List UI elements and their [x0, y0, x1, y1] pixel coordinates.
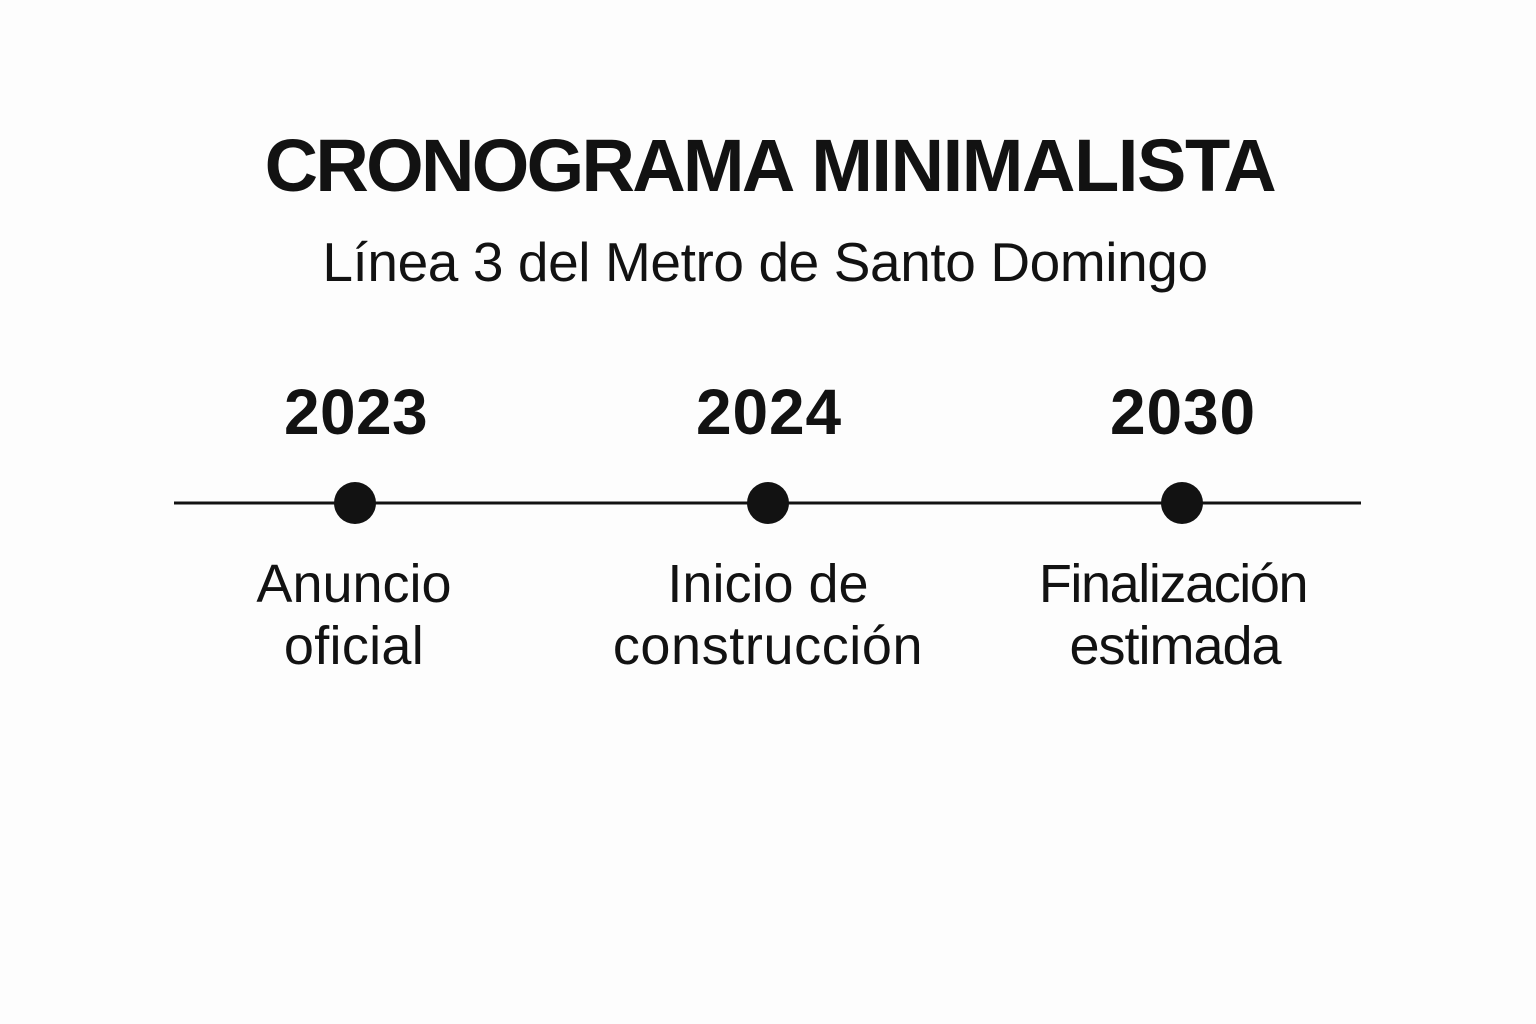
label: Finalización estimada: Finalización	[1039, 554, 1307, 614]
label: Finalización estimada	[1039, 554, 1307, 676]
label: Finalización estimada: estimada	[1069, 616, 1281, 676]
year 2030: 2030	[1110, 376, 1256, 448]
label: Anuncio oficial: oficial	[284, 616, 424, 676]
label: Anuncio oficial: Anuncio	[256, 554, 452, 614]
title: CRONOGRAMA MINIMALISTA	[265, 124, 1275, 207]
year 2024: 2024	[696, 376, 842, 448]
marker 2023	[334, 482, 376, 524]
label: Inicio de construcción	[613, 554, 923, 676]
marker 2030	[1161, 482, 1203, 524]
label: Inicio de construcción: Inicio de	[667, 554, 869, 614]
timeline axis	[174, 502, 1361, 504]
marker 2024	[747, 482, 789, 524]
year 2023: 2023	[284, 376, 428, 448]
label: Inicio de construcción: construcción	[613, 616, 923, 676]
label: Anuncio oficial	[256, 554, 452, 676]
subtitle: Línea 3 del Metro de Santo Domingo	[322, 231, 1208, 293]
